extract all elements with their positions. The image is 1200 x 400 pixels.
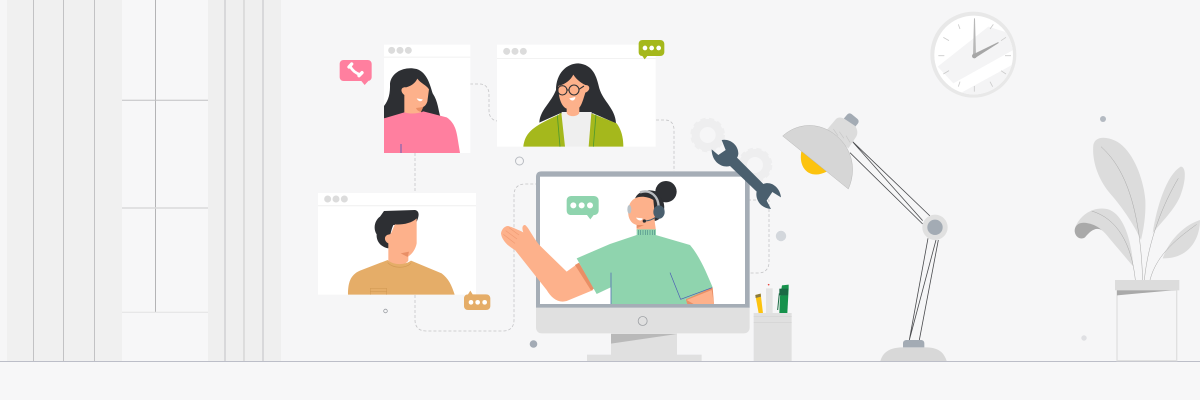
lamp shade, neck and bulb (783, 112, 860, 189)
floor (0, 361, 1200, 400)
pencil cup (754, 284, 792, 361)
icon: green chat bubble (639, 40, 664, 59)
icon: pink phone bubble (340, 60, 372, 85)
desk lamp (783, 112, 948, 361)
background: curtains and window (7, 0, 281, 361)
icon: orange chat bubble (464, 291, 490, 310)
panel: video window man (318, 193, 476, 295)
person: support agent with headset (501, 181, 714, 304)
dashed connector lines (415, 84, 769, 331)
monitor (536, 171, 750, 361)
icon: wrench (712, 140, 781, 209)
potted plant (1075, 138, 1200, 361)
right forearm (686, 287, 714, 304)
lamp arms and base (850, 142, 948, 361)
wall clock (930, 12, 1016, 98)
panel: video window woman with glasses (497, 45, 656, 147)
panel: video window woman in pink (384, 45, 470, 153)
waving arm and hand (501, 225, 594, 302)
decorative dots (384, 116, 1106, 348)
mint top (577, 235, 713, 304)
head with headset (627, 181, 677, 236)
icon: mint chat bubble (567, 196, 599, 219)
icon: gears (692, 119, 771, 181)
